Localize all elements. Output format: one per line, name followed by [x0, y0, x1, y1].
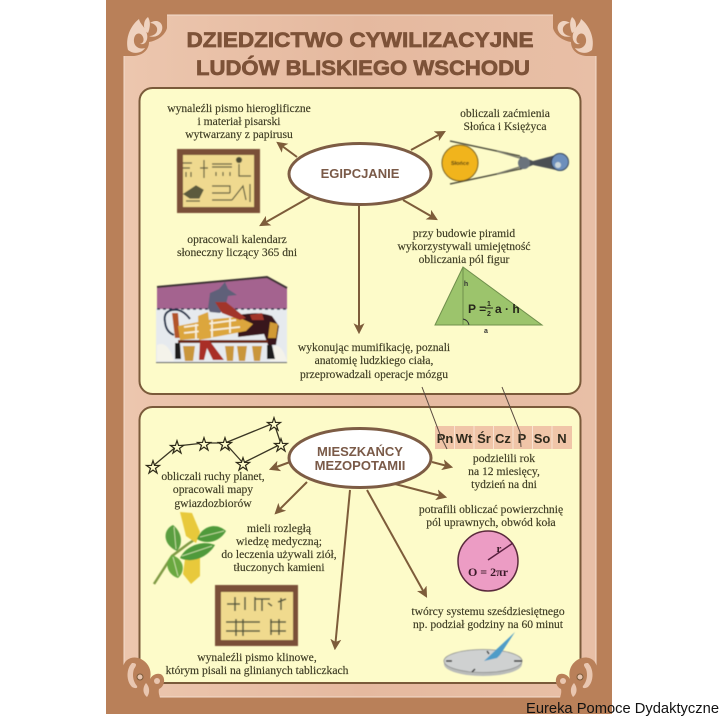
text: planety: opracowali mapy: [173, 483, 253, 496]
diagram: constellation: [145, 415, 289, 478]
text: zaćmienia: Słońca i Księżyca: [463, 120, 547, 133]
image: hieroglyphs: [177, 149, 260, 213]
text: piramidy: wykorzystywali umiejętność: [398, 240, 530, 253]
node: Mieszkańcy Mezopotamii: MEZOPOTAMII: [315, 458, 405, 473]
text: powierzchnia pól: potrafili obliczać powierzchnię: [419, 503, 563, 516]
diagram: triangle area: a: [484, 328, 488, 335]
diagram: triangle area: P =: [468, 302, 486, 316]
text: piramidy: obliczania pól figur: [419, 253, 510, 266]
image: medicinal plant: [154, 512, 226, 584]
node: Mieszkańcy Mezopotamii: [289, 428, 431, 488]
chart: days of week: Wt: [456, 431, 473, 446]
arrows from Mezopotamia: [271, 462, 451, 648]
diagram: eclipse: Słońce: [451, 161, 469, 167]
text: zaćmienia: obliczali zaćmienia: [460, 107, 550, 120]
text: planety: obliczali ruchy planet,: [161, 470, 265, 483]
arrows from Egipcjanie: [261, 132, 444, 332]
text: mumifikacja: przeprowadzali operacje mózgu: [300, 368, 448, 381]
inner frame band: [124, 15, 596, 697]
diagram: triangle area: a · h: [495, 302, 520, 316]
image: cuneiform tablet: [215, 585, 298, 646]
diagram: circle formula: [458, 531, 518, 591]
diagram: constellation: ★: [273, 436, 289, 456]
text: pismo klinowe: wynaleźli pismo klinowe,: [197, 651, 317, 664]
panel: Egipcjanie: [140, 88, 580, 394]
text: mumifikacja: anatomię ludzkiego ciała,: [315, 354, 433, 367]
text: medycyna: mieli rozległą: [247, 522, 312, 535]
diagram: constellation: ★: [217, 435, 233, 455]
corner ornament bottom left: [123, 657, 164, 698]
text: podział roku: tydzień na dni: [471, 478, 537, 491]
corner ornament top right: [553, 14, 597, 56]
text: podział roku: na 12 miesięcy,: [468, 465, 540, 478]
diagram: constellation: ★: [266, 415, 282, 435]
chart: days of week: Pn: [437, 431, 453, 446]
title: LUDÓW BLISKIEGO WSCHODU: [196, 56, 530, 80]
chart: days of week: N: [557, 431, 567, 446]
text: piramidy: przy budowie piramid: [413, 227, 515, 240]
text: kalendarz: opracowali kalendarz: [187, 233, 287, 246]
diagram: circle formula: O = 2πr: [468, 565, 509, 579]
panel: Mieszkańcy Mezopotamii: [140, 407, 580, 683]
image: mummification: [156, 277, 287, 363]
diagram: triangle area: h: [464, 281, 468, 288]
image: sundial: [444, 632, 522, 676]
chart: days of week: Cz: [495, 431, 511, 446]
text: system sześćdziesiętny: np. podział godziny na 60 minut: [413, 618, 564, 631]
diagram: triangle area: 2: [487, 311, 491, 318]
diagram: triangle area: [435, 267, 542, 335]
text: pismo hieroglificzne: i materiał pisarski: [197, 115, 281, 128]
poster background: [106, 0, 612, 714]
text: medycyna: tłuczonych kamieni: [233, 561, 325, 574]
text: pismo hieroglificzne: wynaleźli pismo hieroglificzne: [167, 102, 311, 115]
chart: days of week: P: [518, 431, 527, 446]
text: pismo klinowe: którym pisali na glinianych tabliczkach: [166, 664, 349, 677]
text: medycyna: do leczenia używali ziół,: [221, 548, 337, 561]
diagram: constellation: ★: [235, 455, 251, 475]
diagram: eclipse: [442, 141, 568, 184]
chart: days of week: So: [534, 431, 550, 446]
text: podział roku: podzielili rok: [473, 452, 535, 465]
text: planety: gwiazdozbiorów: [174, 497, 252, 510]
chart: days of week: [435, 426, 572, 449]
corner ornament bottom right: [556, 657, 597, 698]
diagram: constellation: ★: [169, 438, 185, 458]
pointer lines to week days: [422, 387, 521, 449]
text: system sześćdziesiętny: twórcy systemu sześdziesiętnego: [411, 605, 565, 618]
text: mumifikacja: wykonując mumifikację, poznali: [298, 341, 450, 354]
diagram: circle formula: r: [497, 543, 502, 555]
node: Mieszkańcy Mezopotamii: MIESZKAŃCY: [317, 444, 403, 459]
node: Egipcjanie: [289, 144, 431, 204]
text: kalendarz: słoneczny liczący 365 dni: [177, 246, 297, 259]
text: pismo hieroglificzne: wytwarzany z papirusu: [185, 128, 293, 141]
node: Egipcjanie: EGIPCJANIE: [321, 166, 400, 181]
chart: days of week: Śr: [477, 431, 491, 446]
diagram: triangle area: 1: [487, 301, 491, 308]
diagram: constellation: ★: [196, 435, 212, 455]
text: medycyna: wiedzę medyczną;: [236, 535, 322, 548]
corner ornament top left: [123, 14, 167, 56]
title: [186, 29, 534, 80]
title: DZIEDZICTWO CYWILIZACYJNE: [186, 29, 534, 52]
diagram: constellation: ★: [145, 458, 161, 478]
text: powierzchnia pól: pól uprawnych, obwód koła: [426, 516, 556, 529]
